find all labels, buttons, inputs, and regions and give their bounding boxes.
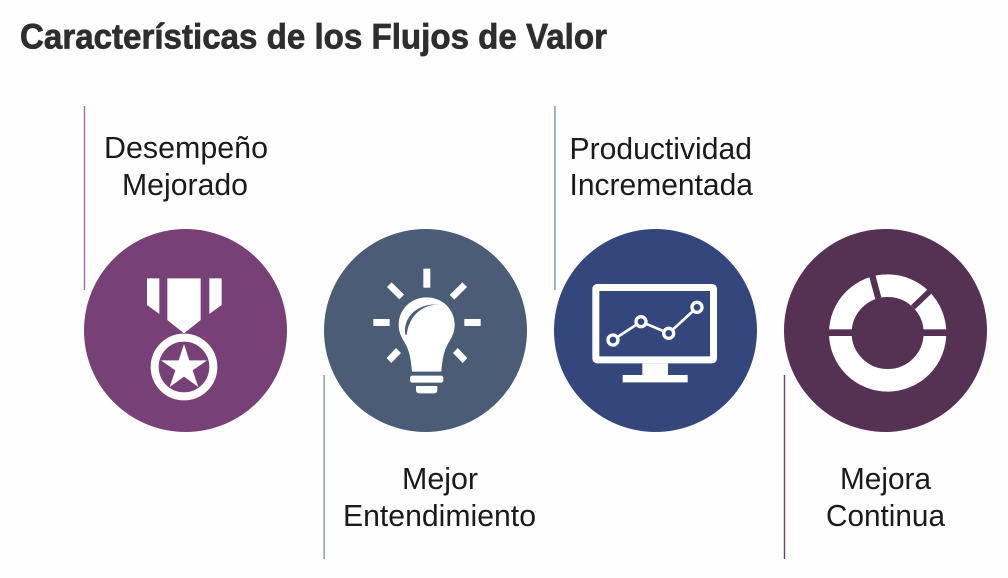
label: Desempeño Mejorado: Mejorado (122, 169, 248, 202)
label: Desempeño Mejorado (104, 132, 268, 202)
circle: purple (84, 229, 287, 432)
panel: Mejor Entendimiento (323, 229, 536, 559)
circle: slate (324, 229, 527, 432)
label: Desempeño Mejorado: Desempeño (104, 132, 268, 165)
label: Productividad Incrementada (570, 133, 753, 202)
title: Características de los Flujos de Valor (20, 18, 607, 56)
icon: light bulb (373, 269, 481, 393)
label: Productividad Incrementada: Incrementada (570, 169, 753, 202)
label: Mejora Continua (826, 463, 945, 533)
label: Mejor Entendimiento (343, 463, 536, 533)
icon: medal (147, 278, 222, 396)
label: Mejor Entendimiento: Entendimiento (343, 500, 536, 533)
label: Productividad Incrementada: Productividad (570, 133, 752, 166)
icon: donut chart (825, 276, 950, 380)
panel: Mejora Continua (784, 229, 987, 559)
panel: Desempeño Mejorado (84, 106, 287, 432)
panel: Productividad Incrementada (554, 106, 757, 432)
circle: plum (784, 229, 987, 432)
label: Mejora Continua: Continua (826, 500, 945, 533)
circle: navy (554, 229, 757, 432)
label: Mejora Continua: Mejora (840, 463, 931, 496)
icon: monitor with line chart (596, 287, 713, 382)
label: Mejor Entendimiento: Mejor (402, 463, 478, 496)
